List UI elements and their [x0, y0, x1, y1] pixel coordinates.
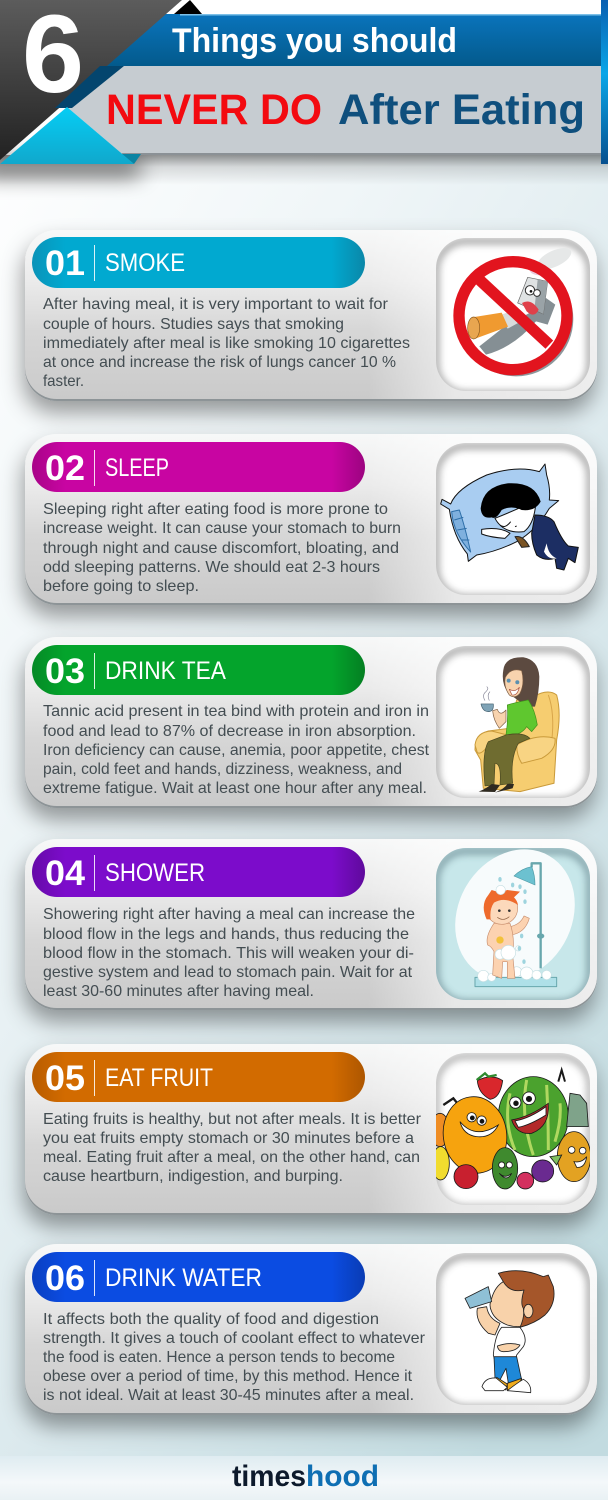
- description: least 30-60 minutes after having meal.: [43, 983, 314, 1000]
- icon: child in shower: [436, 848, 590, 1000]
- description: Eating fruits is healthy, but not after meals. It is better: [43, 1111, 422, 1128]
- card background: [25, 637, 597, 808]
- description: faster.: [43, 373, 84, 390]
- title pill: SMOKE: [105, 249, 185, 277]
- panel: 05 eat fruit: [25, 1044, 597, 1215]
- description: It affects both the quality of food and digestion: [43, 1311, 379, 1328]
- panel: 01 smoke: [25, 230, 597, 401]
- description: [43, 1111, 422, 1185]
- description: food and lead to 87% of decrease in iron absorption.: [43, 723, 416, 740]
- panel: 04 shower: [25, 827, 598, 1010]
- description: Tannic acid present in tea bind with protein and iron in: [43, 703, 429, 720]
- description: [43, 703, 430, 797]
- description: obese over a period of time, by this method. Hence it: [43, 1368, 413, 1385]
- description: immediately after meal is like smoking 10 cigarettes: [43, 335, 410, 352]
- description: at once and increase the risk of lungs cancer 10 %: [43, 354, 396, 371]
- title pill: SLEEP: [105, 454, 169, 482]
- title pill: 06: [45, 1259, 85, 1298]
- description: pain, cold feet and hands, dizziness, weakness, and: [43, 761, 402, 778]
- description: is not ideal. Wait at least 30-45 minutes after a meal.: [43, 1387, 414, 1404]
- card background: [25, 434, 597, 605]
- card background: [25, 1044, 597, 1215]
- title pill: DRINK WATER: [105, 1264, 262, 1292]
- description: gestive system and lead to stomach pain. Wait for at: [43, 964, 413, 981]
- title pill: 01: [45, 244, 85, 283]
- description: increase weight. It can cause your stomach to burn: [43, 520, 401, 537]
- title pill: 04: [45, 854, 86, 893]
- description: strength. It gives a touch of coolant effect to whatever: [43, 1330, 426, 1347]
- description: [43, 296, 410, 390]
- description: blood flow in the stomach. This will weaken your di-: [43, 945, 414, 962]
- description: couple of hours. Studies says that smoking: [43, 316, 344, 333]
- description: [43, 906, 415, 1000]
- description: After having meal, it is very important to wait for: [43, 296, 389, 313]
- description: Showering right after having a meal can increase the: [43, 906, 415, 923]
- description: extreme fatigue. Wait at least one hour after any meal.: [43, 780, 427, 797]
- icon: cartoon fruits: [431, 1053, 591, 1208]
- title pill: 05: [45, 1059, 85, 1098]
- description: the food is eaten. Hence a person tends to become: [43, 1349, 395, 1366]
- panel: 06 drink water: [25, 1244, 597, 1415]
- panel: 02 sleep: [25, 434, 597, 605]
- icon: woman drinking tea: [436, 646, 590, 801]
- title pill: [32, 1052, 365, 1102]
- title pill: [32, 645, 365, 695]
- heading line 1: Things you should: [172, 22, 457, 60]
- icon: sleeping on a pillow: [436, 443, 590, 598]
- title pill: [32, 1252, 365, 1302]
- title pill: 02: [45, 449, 85, 488]
- title pill: SHOWER: [105, 859, 205, 887]
- card background: [25, 230, 597, 401]
- title pill: [32, 442, 365, 492]
- description: meal. Eating fruit after a meal, on the other hand, can: [43, 1149, 420, 1166]
- logo: timeshood: hood: [306, 1460, 379, 1493]
- description: before going to sleep.: [43, 578, 199, 595]
- description: Sleeping right after eating food is more prone to: [43, 501, 388, 518]
- icon: no smoking: [436, 238, 590, 394]
- title pill: DRINK TEA: [105, 657, 226, 685]
- description: through night and cause discomfort, bloating, and: [43, 540, 399, 557]
- panel: 03 drink tea: [25, 637, 597, 808]
- heading line 2: After Eating: [338, 86, 585, 134]
- footer band: [0, 1456, 608, 1500]
- description: [43, 501, 401, 595]
- icon: boy drinking water: [436, 1253, 590, 1408]
- logo: timeshood: times: [232, 1460, 306, 1493]
- heading line 2: NEVER DO: [106, 86, 322, 134]
- title pill: [32, 847, 365, 897]
- card background: [25, 1244, 597, 1415]
- card background: [25, 839, 597, 1010]
- title pill: 03: [45, 652, 85, 691]
- title pill: EAT FRUIT: [105, 1064, 213, 1092]
- description: blood flow in the legs and hands, thus reducing the: [43, 926, 409, 943]
- heading line 2: [106, 86, 585, 134]
- header banner: [0, 0, 608, 185]
- description: [43, 1311, 426, 1404]
- logo: timeshood: [232, 1460, 379, 1493]
- description: odd sleeping patterns. We should eat 2-3 hours: [43, 559, 380, 576]
- title pill: [32, 237, 365, 288]
- description: cause heartburn, indigestion, and burping.: [43, 1168, 343, 1185]
- description: Iron deficiency can cause, anemia, poor appetite, chest: [43, 742, 430, 759]
- description: you eat fruits empty stomach or 30 minutes before a: [43, 1130, 414, 1147]
